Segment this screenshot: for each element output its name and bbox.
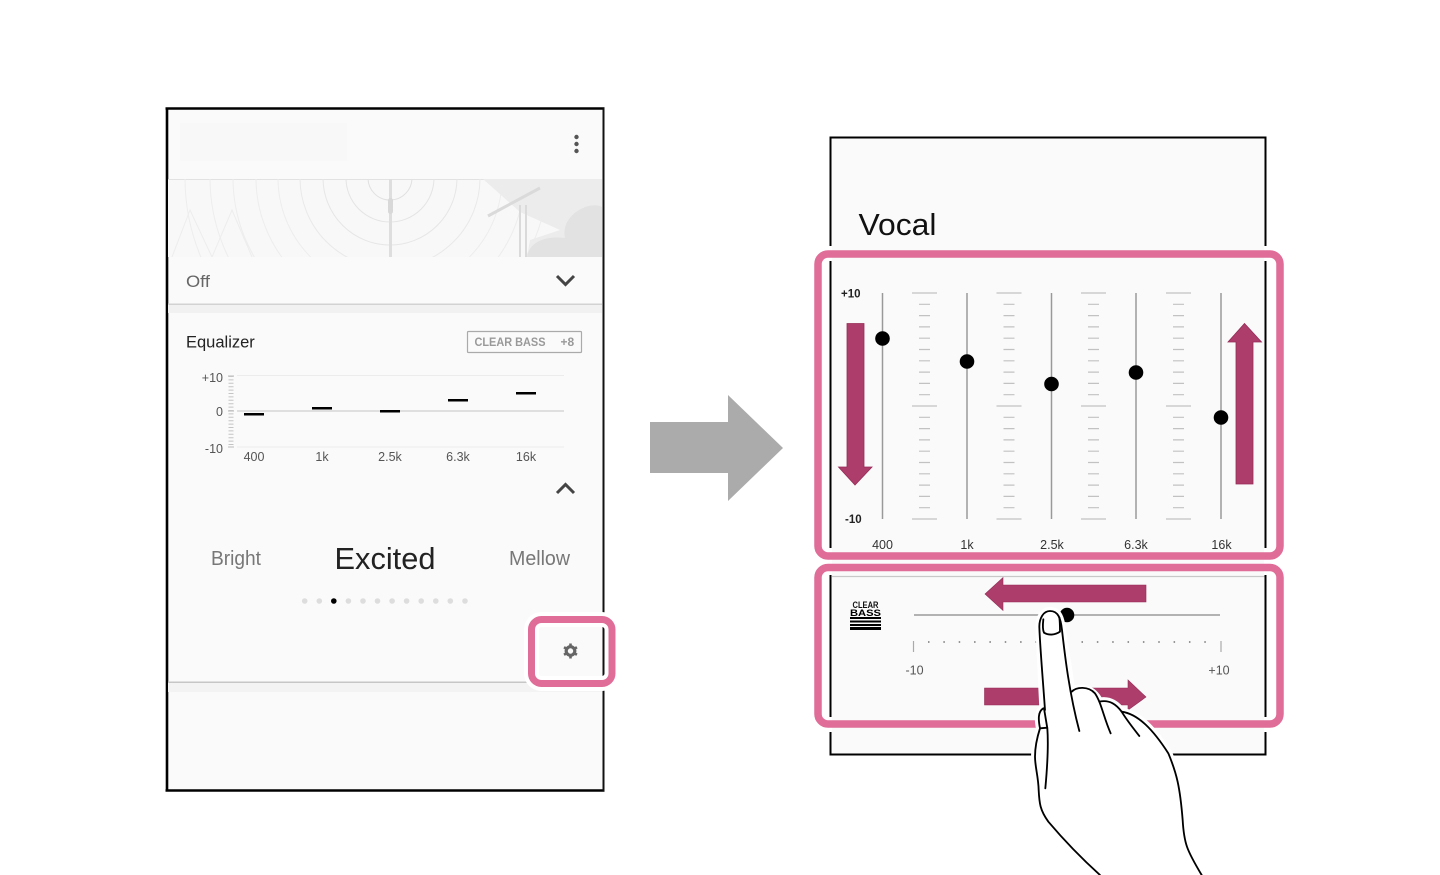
logo: Clear Bass: BASS [850,608,881,619]
arrow: slide down [838,324,872,485]
frequency labels: 6.3k [1124,538,1149,552]
equalizer sliders [841,288,1232,552]
chart: equalizer curve preview: -10 [205,442,223,456]
scale labels: +10 [841,288,861,300]
chart: equalizer curve preview: 6.3k [446,450,471,464]
icon: chevron down [557,276,574,284]
arrow: slide right [984,680,1146,710]
blank title placeholder [180,123,347,161]
icon: settings gear [564,644,577,658]
slider track [914,614,1220,616]
callout: equalizer highlight [818,246,1280,575]
preset carousel labels: Bright [211,548,261,570]
chart: equalizer curve preview: 1k [315,450,329,464]
icon: chevron up [557,484,574,493]
badge: Clear Bass +8 [468,332,582,352]
preset carousel labels: Mellow [509,548,571,570]
illustration: microphone sound waves banner [168,179,602,257]
slider knobs [875,331,1228,425]
chart: equalizer curve preview: 2.5k [378,450,403,464]
panel: clear bass slider [830,575,1266,717]
preset carousel labels: Excited [334,541,436,576]
scale labels: -10 [845,514,862,526]
arrow: slide up [1228,324,1262,484]
panel: phone equalizer screen [166,107,604,792]
heading: Vocal: Vocal [858,207,936,242]
scale labels: -10 [905,664,924,678]
slider scale [914,641,1221,652]
scale labels [905,664,1230,678]
frequency labels: 2.5k [1040,538,1065,552]
preset value: Off: Off [186,273,210,291]
frequency labels: 16k [1211,538,1232,552]
slider knob [1060,608,1074,622]
scale labels: +10 [1208,664,1230,678]
badge: Clear Bass +8: CLEAR BASS [474,335,546,349]
badge: Clear Bass +8: +8 [560,335,575,349]
chart: equalizer curve preview [202,371,564,464]
preset carousel labels [211,541,571,576]
chart: equalizer curve preview: +10 [202,371,223,385]
frequency labels: 1k [960,538,974,552]
icon: overflow menu [574,135,579,153]
scale labels [841,288,862,526]
chart: equalizer curve preview: 16k [516,450,537,464]
carousel page dots [302,598,468,604]
bottom card edge [168,682,602,692]
frequency labels: 400 [872,538,893,552]
logo: Clear Bass [850,600,881,630]
frequency labels [872,538,1232,552]
divider band [168,304,602,313]
arrow: gray transition arrow [650,395,783,501]
slider tracks [882,293,1221,519]
chart: equalizer curve preview: 400 [244,450,264,464]
chart: equalizer curve preview: 0 [216,405,223,419]
callout: clear bass highlight [818,568,1280,732]
icon: pointing hand [1035,611,1202,875]
arrow: slide left [985,578,1146,610]
heading: Equalizer: Equalizer [186,334,255,352]
logo: Clear Bass: CLEAR [852,600,879,610]
callout: settings highlight [532,620,612,684]
tick scales [912,293,1191,519]
panel: vocal equalizer settings [830,138,1266,754]
